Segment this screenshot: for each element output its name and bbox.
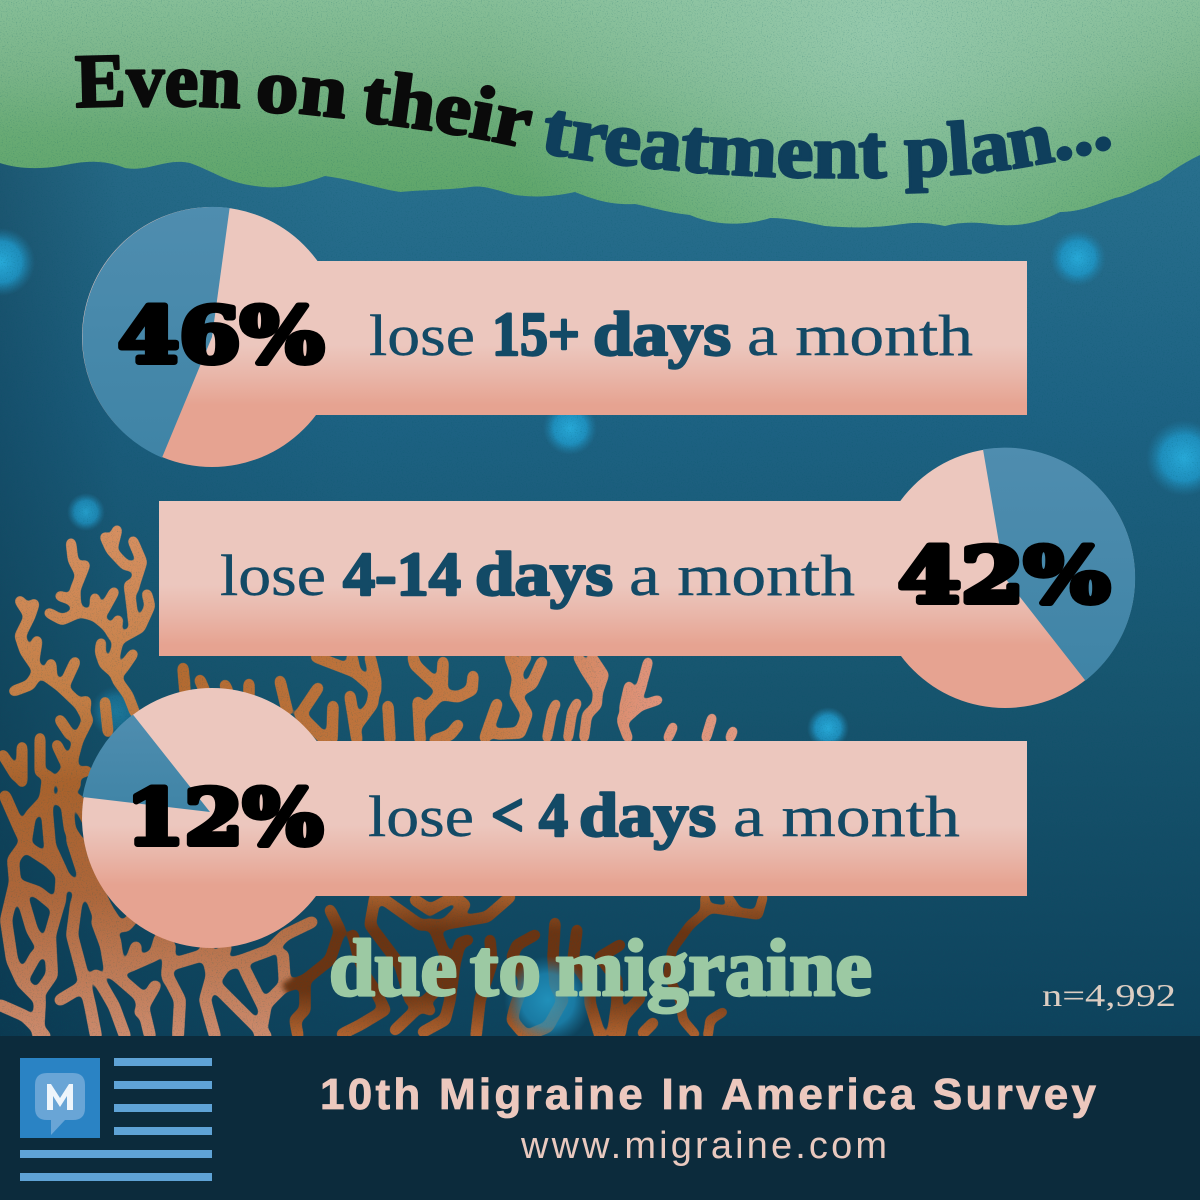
footer — [0, 1036, 1200, 1200]
caption: due to migraine: to — [470, 925, 541, 1013]
row label: lose — [368, 784, 474, 849]
pie base — [82, 688, 342, 948]
pie base — [82, 207, 342, 467]
title: blue part: plan... — [904, 120, 1112, 194]
percentage: 12% — [126, 773, 323, 862]
pie slice — [82, 715, 210, 812]
row label: lose — [220, 543, 326, 608]
row label: days — [593, 301, 731, 369]
title: black part — [74, 54, 533, 147]
row label — [220, 541, 855, 609]
bar 1: 46% — [82, 207, 1027, 467]
bar 2: 42% — [159, 448, 1135, 708]
title: black part: their — [364, 70, 533, 147]
title: black part: Even — [74, 54, 240, 109]
coral: upper left tree — [3, 601, 108, 782]
coral reef — [0, 530, 763, 1036]
row label — [369, 301, 973, 369]
coral: dark branches behind caption — [288, 897, 653, 1036]
row label: lose — [369, 303, 475, 368]
bubble behind caption — [504, 956, 592, 1044]
row label: < 4 — [491, 782, 568, 850]
title: black part: on — [258, 75, 346, 120]
caption: due to migraine: migraine — [555, 925, 872, 1013]
sample size: n=4,992 — [1042, 977, 1176, 1013]
coral: between bars — [183, 657, 542, 740]
percentage: 46% — [118, 291, 324, 380]
footer band — [0, 1036, 1200, 1200]
title: blue part — [544, 110, 1112, 194]
row label: a month — [629, 543, 855, 608]
caption: due to migraine — [329, 925, 872, 1013]
row label: days — [475, 541, 613, 609]
caption: due to migraine: due — [329, 925, 457, 1013]
bar body — [300, 741, 1027, 896]
coral: lower left network — [0, 760, 160, 1036]
pie slice — [82, 207, 230, 458]
row label: 15+ — [492, 301, 580, 369]
row label: 4-14 — [343, 541, 461, 609]
row label: days — [579, 782, 716, 850]
green surface with wavy edge — [0, 0, 1200, 227]
coral: bottom left fans — [167, 922, 312, 1036]
bar 3: 12% — [82, 688, 1027, 948]
row label — [368, 782, 960, 850]
flag stripes — [20, 1058, 212, 1181]
footer url: www.migraine.com — [520, 1125, 887, 1167]
title — [74, 54, 1112, 194]
bubbles — [0, 228, 1200, 749]
percentage: 42% — [898, 531, 1110, 620]
title: blue part: treatment — [544, 110, 888, 180]
icon: M speech bubble — [20, 1058, 100, 1138]
footer title: 10th Migraine In America Survey — [320, 1070, 1097, 1119]
logo flag — [20, 1058, 212, 1181]
coral: right branch — [668, 897, 763, 1036]
pie base — [875, 448, 1135, 708]
pie slice — [983, 448, 1135, 681]
bar body — [300, 261, 1027, 415]
row label: a month — [747, 303, 973, 368]
coral: upper right tree — [49, 530, 150, 713]
coral: pink branches between bars — [547, 657, 733, 738]
bar body — [159, 501, 1009, 656]
row label: a month — [733, 784, 960, 849]
